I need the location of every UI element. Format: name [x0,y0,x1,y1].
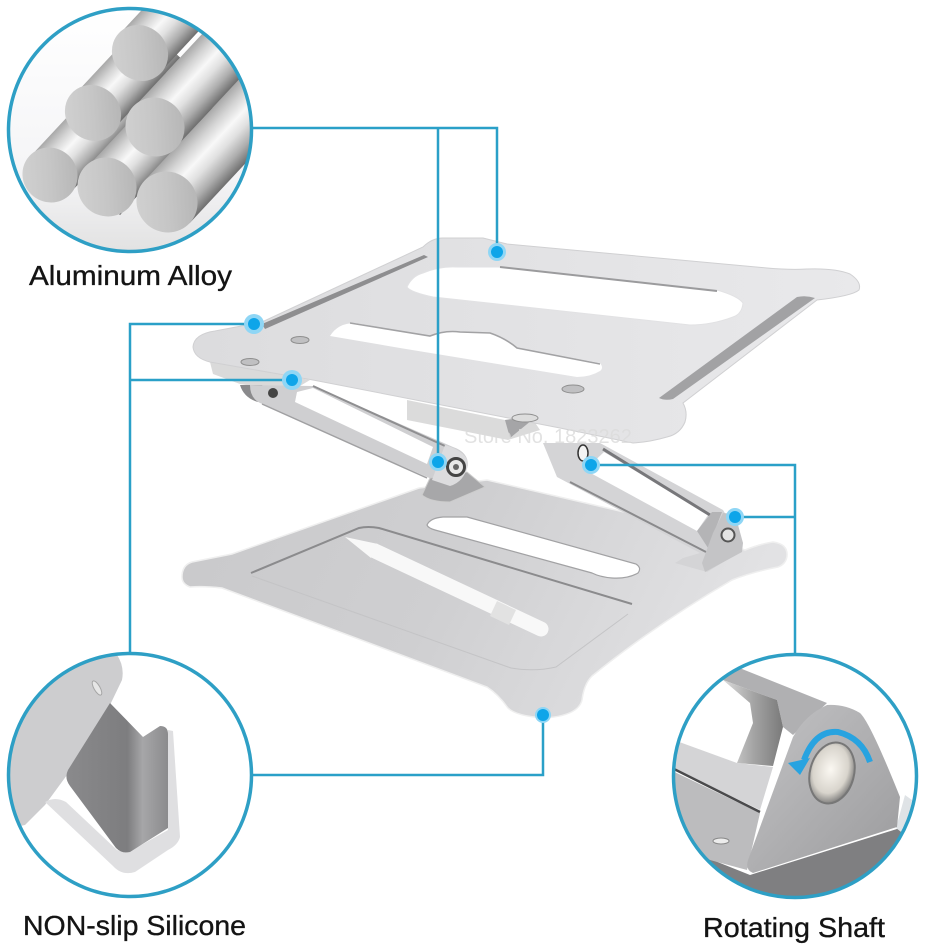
screw [92,680,102,696]
screw [713,838,729,844]
dark top edge [603,449,710,515]
heading: Rotating Shaft: Rotating Shaft [703,912,885,943]
stylus pencil [345,537,541,629]
lower dark edge [570,482,706,552]
curved inner face [723,680,783,766]
grey plate corner [10,656,123,826]
dark pivot shadow [240,385,275,402]
recessed panel outline [251,527,632,604]
left scissor arm [240,385,485,502]
panel: non-slip silicone circle [0,650,252,896]
triangular bracket [747,705,900,873]
arm bar [676,742,773,810]
silicone pad [66,703,168,852]
lower slot [330,323,602,377]
heading: NON-slip Silicone: NON-slip Silicone [23,910,246,941]
arm window [295,388,433,464]
base surface [708,829,901,896]
heading: Aluminum Alloy: Aluminum Alloy [29,260,232,291]
right scissor arm [543,443,743,572]
watermark: Store No. 1823262 [464,426,632,448]
base plate slot [427,517,640,578]
callout lines [130,128,795,775]
hinge bolt [448,458,464,476]
arm lower edge [262,404,427,478]
base plate of the stand [182,480,787,718]
right light edge [896,795,912,835]
screw holes [291,336,309,344]
right grey strip [659,296,815,400]
silver rim [45,730,180,873]
arm dark edge [668,766,760,812]
front left bracket [210,362,310,392]
circle outline [8,654,252,896]
bracket [702,513,743,572]
bracket hole [722,528,734,542]
small dark notch [505,416,537,438]
underside apron [407,400,540,440]
shaft ball [808,742,856,804]
panel: rotating shaft circle [660,654,925,910]
upper pivot [578,445,588,461]
hinge pivot left [268,388,278,398]
top plate of the stand [193,238,860,443]
left grey strip [262,255,428,329]
aluminum rods [22,10,250,232]
bracket inner face [697,512,722,548]
lower arm surface [675,772,760,870]
circle outline [674,654,916,898]
circle outline [8,8,252,252]
faint inner rectangle [252,576,628,670]
top band [723,667,827,735]
upper slot [407,267,743,325]
rotation arrow [788,732,870,775]
hinge foot [422,472,485,502]
panel: aluminum alloy circle [6,6,254,254]
arm window [585,452,708,531]
arm top edge [313,386,445,446]
callout dots [244,243,744,723]
hinge end [432,445,468,486]
